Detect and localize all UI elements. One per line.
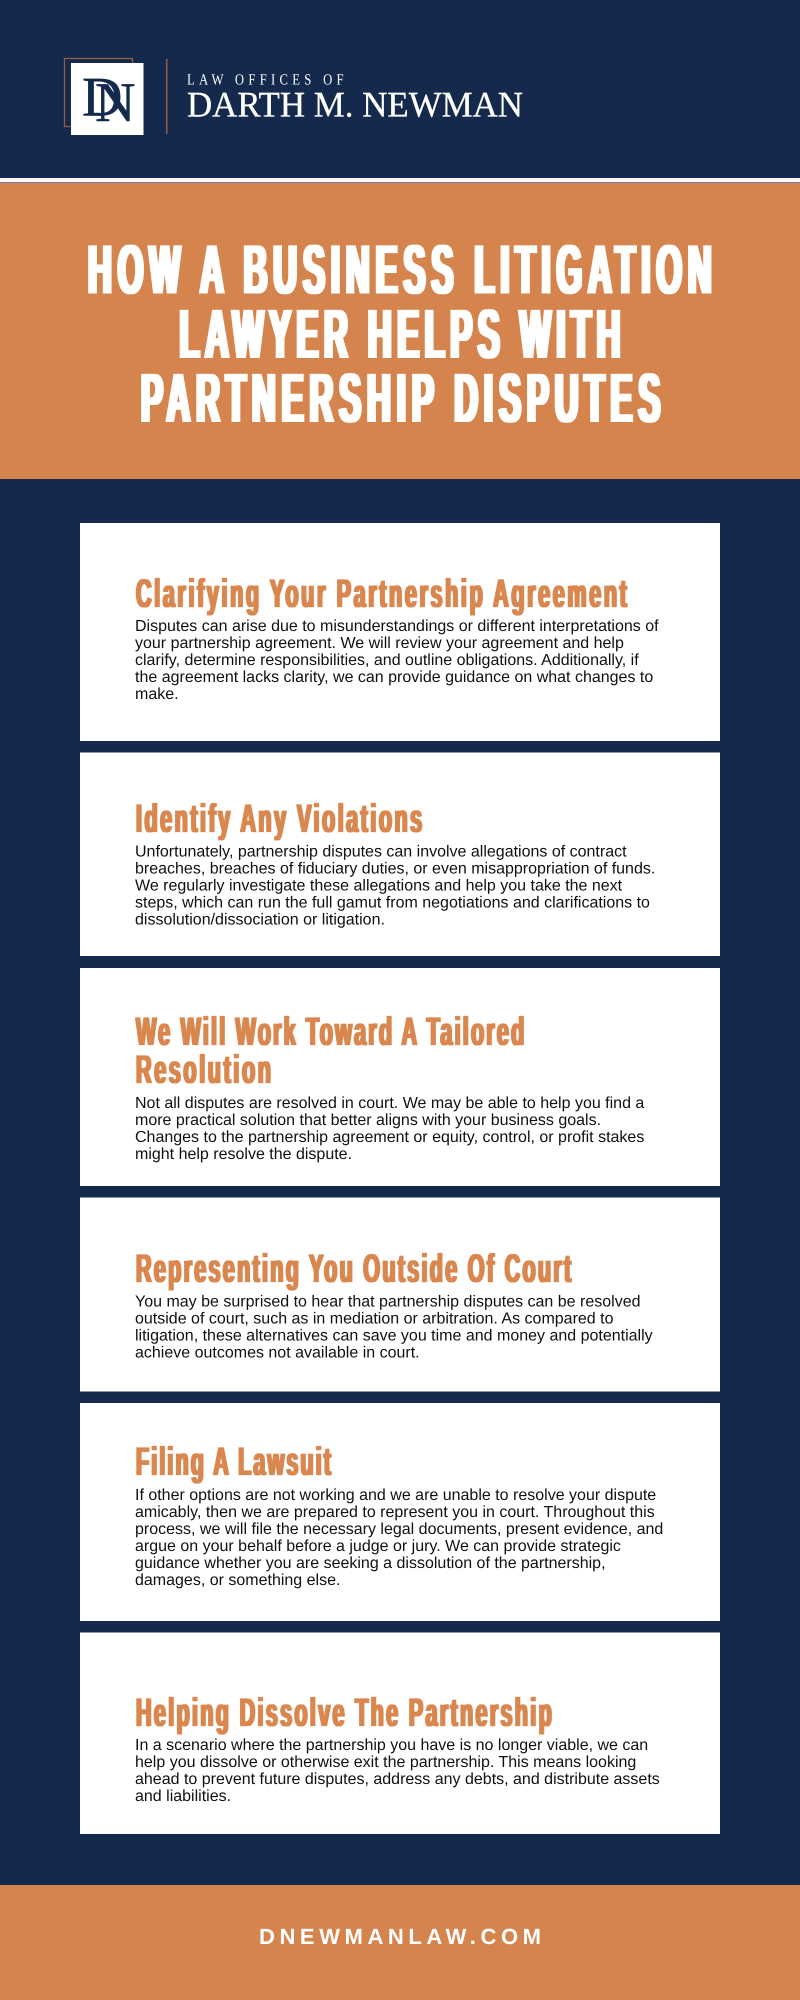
panel: we will work toward a tailored resolution (80, 968, 720, 1186)
firm name: DARTH M. NEWMAN (187, 85, 523, 125)
text block: breaches, breaches of fiduciary duties, or even misappropriation of funds. (135, 861, 655, 878)
text block: make. (135, 686, 179, 703)
panel: filing a lawsuit (80, 1403, 720, 1621)
text block (135, 1487, 663, 1589)
text block: Disputes can arise due to misunderstandings or different interpretations of (135, 618, 659, 635)
text block: guidance whether you are seeking a dissolution of the partnership, (135, 1555, 606, 1572)
heading: Helping Dissolve The Partnership (136, 1691, 552, 1735)
text block: achieve outcomes not available in court. (135, 1345, 420, 1362)
text block: Not all disputes are resolved in court. We may be able to help you find a (135, 1095, 644, 1112)
text block (135, 844, 655, 929)
text block: We regularly investigate these allegations and help you take the next (135, 878, 623, 895)
white divider stripe (0, 178, 800, 183)
text block: dissolution/dissociation or litigation. (135, 912, 385, 929)
panel: helping dissolve the partnership (80, 1632, 720, 1834)
heading (136, 1010, 524, 1092)
panel: representing you outside of court (80, 1198, 720, 1392)
heading: Identify Any Violations (136, 797, 422, 841)
text block (135, 1294, 653, 1362)
footer: website (0, 1885, 800, 2000)
text block: process, we will file the necessary legal documents, present evidence, and (135, 1521, 663, 1538)
title banner: LAWYER HELPS WITH (180, 295, 620, 373)
footer: website: DNEWMANLAW.COM (259, 1924, 541, 1949)
text block: and liabilities. (135, 1788, 231, 1805)
title banner: PARTNERSHIP DISPUTES (141, 359, 660, 437)
text block: In a scenario where the partnership you have is no longer viable, we can (135, 1737, 648, 1754)
text block: Unfortunately, partnership disputes can involve allegations of contract (135, 844, 627, 861)
title banner: HOW A BUSINESS LITIGATION (88, 231, 712, 309)
text block: damages, or something else. (135, 1572, 340, 1589)
panel: identify any violations (80, 752, 720, 956)
heading: Filing A Lawsuit (136, 1440, 331, 1484)
firm name: LAW OFFICES OF (187, 72, 344, 89)
heading: We Will Work Toward A Tailored (136, 1010, 524, 1054)
text block: more practical solution that better aligns with your business goals. (135, 1112, 601, 1129)
heading: Representing You Outside Of Court (136, 1247, 571, 1291)
text block: Changes to the partnership agreement or equity, control, or profit stakes (135, 1129, 644, 1146)
text block: the agreement lacks clarity, we can provide guidance on what changes to (135, 669, 653, 686)
text block: clarify, determine responsibilities, and outline obligations. Additionally, if (135, 652, 639, 669)
text block: argue on your behalf before a judge or jury. We can provide strategic (135, 1538, 621, 1555)
icon: DN monogram logo: D (82, 66, 122, 128)
icon: DN monogram logo: N (95, 72, 135, 134)
text block: ahead to prevent future disputes, address any debts, and distribute assets (135, 1771, 660, 1788)
heading: Clarifying Your Partnership Agreement (136, 572, 627, 616)
text block: outside of court, such as in mediation or arbitration. As compared to (135, 1311, 614, 1328)
text block: help you dissolve or otherwise exit the partnership. This means looking (135, 1754, 636, 1771)
text block: litigation, these alternatives can save you time and money and potentially (135, 1328, 653, 1345)
text block: might help resolve the dispute. (135, 1146, 352, 1163)
text block: You may be surprised to hear that partnership disputes can be resolved (135, 1294, 640, 1311)
panel: clarifying your partnership agreement (80, 523, 720, 741)
heading: Resolution (136, 1048, 271, 1092)
text block (135, 618, 659, 703)
text block: amicably, then we are prepared to represent you in court. Throughout this (135, 1504, 655, 1521)
icon: DN monogram logo (64, 58, 144, 135)
text block (135, 1737, 660, 1805)
text block: steps, which can run the full gamut from negotiations and clarifications to (135, 895, 650, 912)
text block: If other options are not working and we are unable to resolve your dispute (135, 1487, 656, 1504)
text block (135, 1095, 644, 1163)
header: law firm logo band (0, 0, 800, 178)
text block: your partnership agreement. We will review your agreement and help (135, 635, 624, 652)
title banner (0, 183, 800, 479)
